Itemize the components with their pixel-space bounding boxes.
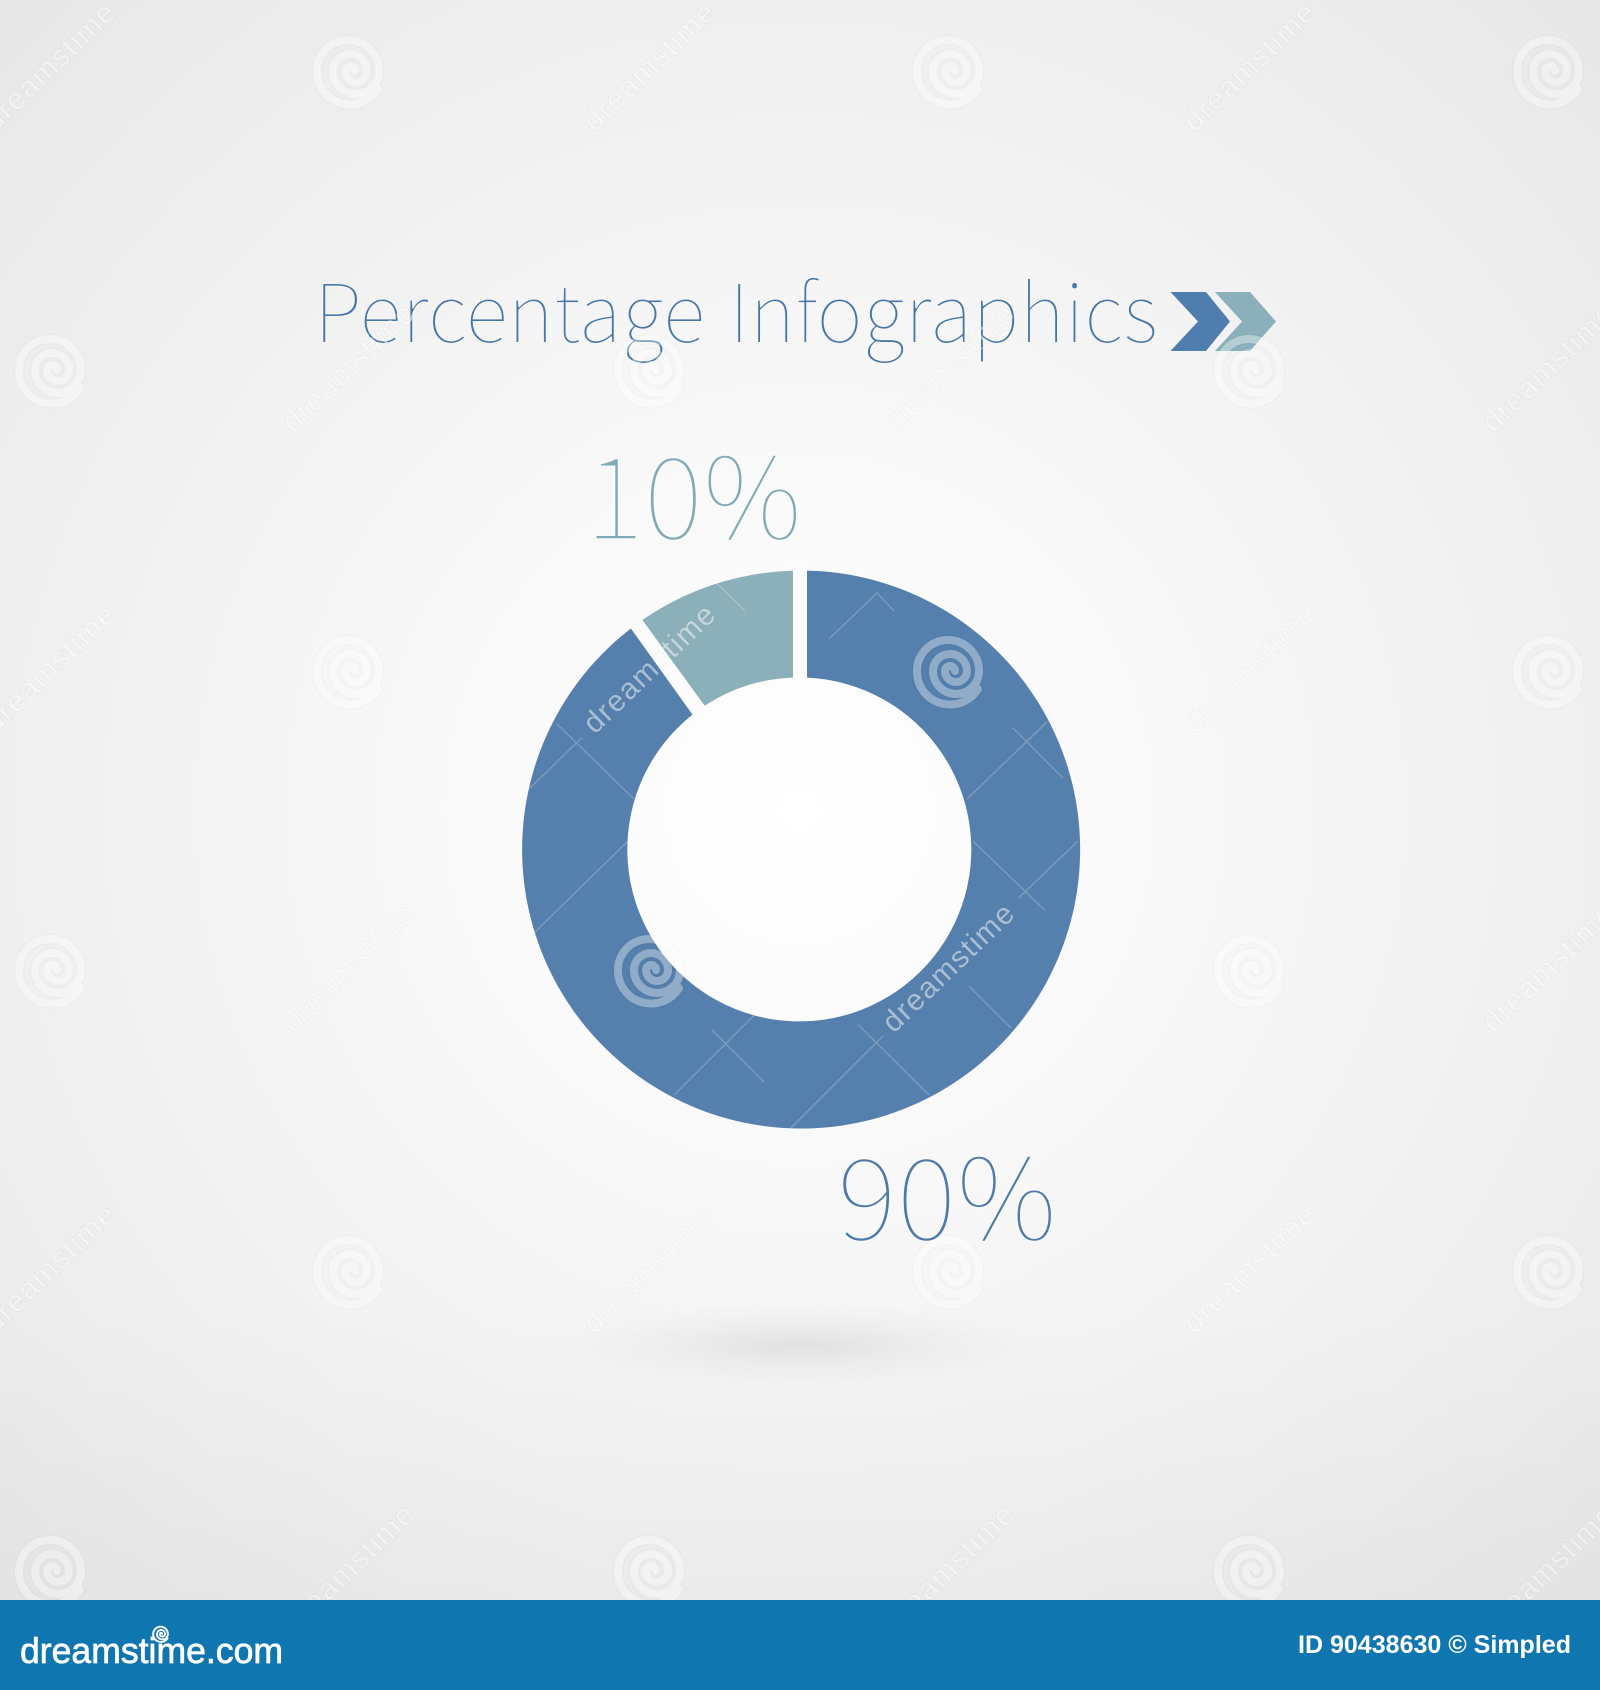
- watermark overlay: dreamstime: [276, 1498, 421, 1640]
- watermark overlay: dreamstime: [1177, 1198, 1322, 1340]
- watermark overlay: dreamstime: [577, 1198, 722, 1340]
- segment: 10%: [642, 571, 793, 706]
- watermark overlay: dreamstime: [577, 598, 722, 740]
- watermark overlay: dreamstime: [577, 0, 722, 138]
- footer bar: [0, 1600, 1600, 1690]
- label: 10%: 10%: [585, 407, 802, 572]
- watermark overlay: dreamstime: [1177, 0, 1322, 138]
- title: Percentage Infographics: Percentage: [314, 250, 705, 366]
- watermark overlay: dreamstime: [276, 297, 421, 439]
- title: Percentage Infographics: [314, 250, 1158, 366]
- title: Percentage Infographics: Infographics: [729, 250, 1158, 366]
- watermark overlay: dreamstime: [876, 897, 1021, 1039]
- ground shadow: [560, 1303, 1040, 1387]
- footer id and credit: ID 90438630 © Simpled: [1298, 1631, 1571, 1659]
- icon: double chevron arrow: [1170, 292, 1276, 351]
- segment: 90%: [522, 571, 1080, 1129]
- donut chart: [522, 571, 1080, 1129]
- background lower shading: [0, 1300, 1600, 1600]
- label: 90%: 90%: [837, 1108, 1057, 1273]
- footer logo: dreamstime.com: dreamstime.com: [20, 1630, 283, 1671]
- watermark overlay: dreamstime: [276, 897, 421, 1039]
- watermark overlay: dreamstime: [876, 297, 1021, 439]
- watermark overlay: dreamstime: [1177, 598, 1322, 740]
- watermark overlay: dreamstime: [876, 1498, 1021, 1640]
